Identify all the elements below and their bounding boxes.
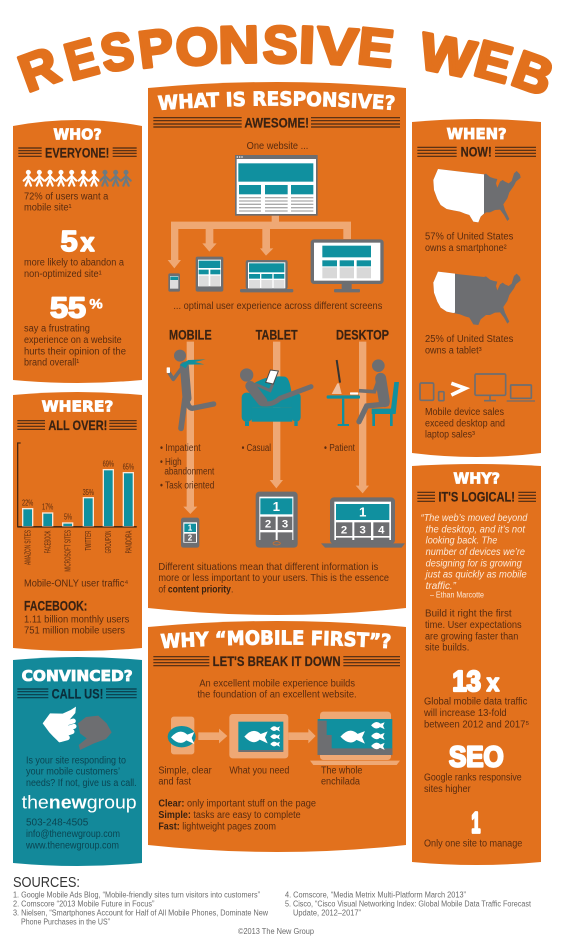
stat: 5x: [61, 226, 95, 258]
panel: convinced: [13, 657, 142, 866]
text: frustrating experience: hurts their opinion of the: [24, 346, 126, 357]
text: call to action: [26, 755, 137, 789]
bar chart: mobile-only traffic: PANDORA: [124, 531, 134, 553]
text: build it right: time. User expectations: [425, 620, 522, 631]
text: build it right: [425, 609, 522, 654]
text: device sales: [425, 407, 505, 441]
text: google ranks: sites higher: [424, 784, 471, 795]
text: abandon: non-optimized site¹: [24, 269, 102, 280]
text: intro: An excellent mobile experience builds: [199, 679, 355, 690]
text: intro: [197, 679, 357, 701]
sources right column: 5. Cisco, “Cisco Visual Networking Index: Global Mobile Data Traffic Forecast: [285, 900, 532, 909]
text: intro: the foundation of an excellent website.: [197, 690, 357, 701]
title: S: [262, 16, 298, 75]
arrow: tablet: [270, 342, 283, 488]
title: I: [298, 16, 316, 74]
text: facebook stats: [24, 599, 129, 637]
subheading: all over: [17, 418, 137, 433]
icon: person at desk: [327, 359, 399, 426]
panel: why: [412, 464, 541, 865]
text: tablet stat: owns a tablet³: [425, 345, 482, 356]
icon: running person: [167, 350, 214, 428]
text: smartphone stat: owns a smartphone²: [425, 243, 507, 254]
subheading: everyone: [18, 145, 137, 160]
icon: mobile greater than desktop: [420, 374, 535, 401]
icon: tablet layout: 3: [282, 519, 288, 531]
text: google ranks: [424, 773, 522, 795]
title: [12, 16, 561, 108]
text: build it right: Build it right the first: [425, 609, 512, 620]
text: contact details: www.thenewgroup.com: [25, 840, 119, 851]
sources heading: SOURCES:: [13, 874, 80, 891]
icon: tablet layout: 1: [273, 499, 281, 514]
icon: row of people: [24, 170, 131, 186]
arrow: phone to tablet: [198, 729, 227, 743]
text: device sales: laptop sales³: [425, 430, 476, 441]
panel: where: [13, 392, 142, 651]
icon: laptop layout: 3: [360, 524, 366, 536]
heading: when: WHEN?: [447, 126, 507, 143]
quote: ethan marcotte: “The web’s moved beyond: [421, 513, 528, 524]
text: mobile traits: • Impatient: [160, 443, 201, 454]
icon: tablet with fish: [229, 714, 288, 758]
quote: ethan marcotte: – Ethan Marcotte: [430, 589, 484, 599]
text: frustrating experience: say a frustrating: [24, 324, 90, 335]
subheading: break it down: LET'S BREAK IT DOWN: [213, 654, 341, 669]
text: content priority: [158, 562, 389, 595]
icon: laptop with fish: [310, 712, 400, 765]
bar chart: mobile-only traffic: 35%: [83, 488, 94, 497]
bar chart: mobile-only traffic: MICROSOFT SITES: [63, 530, 73, 572]
subheading: break it down: [153, 654, 400, 669]
text: data traffic: [423, 697, 529, 730]
label: desktop: DESKTOP: [336, 327, 389, 342]
quote: ethan marcotte: just as quickly as mobile: [424, 570, 527, 581]
text: tablet trait: • Casual: [242, 443, 271, 454]
stat: 13x: [452, 666, 500, 698]
heading: what is responsive: WHAT IS RESPONSIVE?: [157, 90, 395, 110]
icon: phone: [168, 273, 180, 292]
icon: phone layout: [181, 518, 199, 548]
text: abandon: more likely to abandon a: [24, 258, 124, 269]
title: R: [12, 36, 67, 104]
text: 72 percent: 72% of users want a: [24, 191, 109, 202]
panel: when: [412, 119, 541, 457]
quote: ethan marcotte: the desktop, and it’s not: [426, 524, 526, 535]
text: mobile traits: [160, 443, 215, 491]
text: tablet stat: 25% of United States: [425, 334, 513, 345]
text: call to action: Is your site responding to: [26, 755, 126, 766]
arrows: tree to devices: [168, 216, 351, 268]
text: frustrating experience: brand overall¹: [24, 358, 80, 369]
bar chart: mobile-only traffic: AMAZON SITES: [22, 530, 32, 565]
copyright: ©2013 The New Group: [238, 927, 314, 936]
subheading: awesome: [153, 116, 400, 131]
icon: person on sofa: [240, 368, 311, 426]
title: E: [469, 29, 518, 95]
logo: the new group: thenewgroup: [22, 791, 137, 812]
text: data traffic: Global mobile data traffic: [424, 697, 527, 708]
text: build it right: site builds.: [425, 643, 469, 654]
title: P: [135, 18, 177, 80]
icon: phone layout: 2: [188, 534, 193, 543]
text: the whole enchilada: enchilada: [321, 776, 360, 787]
title: V: [315, 17, 360, 77]
stat: 55 percent: [50, 293, 103, 325]
sources left column: [13, 891, 268, 927]
panel: what is responsive: [148, 82, 406, 615]
text: desktop trait: • Patient: [324, 443, 355, 454]
text: data traffic: will increase 13-fold: [423, 708, 507, 719]
text: the whole enchilada: The whole: [321, 765, 363, 776]
arrow: tablet to laptop: [288, 729, 316, 743]
title: N: [218, 16, 259, 74]
text: tablet stat: [425, 334, 513, 356]
text: device sales: Mobile device sales: [425, 407, 504, 418]
text: contact details: 503-248-4505: [26, 818, 89, 829]
quote: ethan marcotte: [421, 513, 528, 599]
stat: seo: SEO: [449, 742, 504, 774]
text: frustrating experience: experience on a website: [24, 335, 122, 346]
bar chart: mobile-only traffic: FACEBOOK: [42, 531, 52, 553]
text: what you need: What you need: [229, 765, 289, 776]
stat: 5x: 5: [61, 226, 78, 258]
icon: phone with fishbowl: [168, 717, 196, 754]
text: facebook stats: 751 million mobile users: [24, 626, 125, 637]
title: S: [96, 20, 138, 84]
icon: laptop: [240, 260, 293, 292]
stat: 13x: 13: [452, 666, 481, 698]
text: definitions: Clear: only important stuff on the page: [158, 799, 316, 810]
icon: laptop layout: 2: [341, 524, 347, 536]
sources left column: Phone Purchases in the US”: [21, 918, 110, 927]
bar chart: mobile-only traffic: 22%: [22, 499, 33, 508]
map: tablet share: [433, 272, 521, 325]
text: simple clear and fast: [158, 765, 212, 787]
text: smartphone stat: [425, 232, 513, 254]
quote: ethan marcotte: number of devices we’re: [426, 547, 525, 558]
text: one website: One website ...: [247, 141, 308, 152]
icon: laptop layout: 1: [359, 505, 367, 520]
title: E: [355, 17, 396, 79]
text: content priority: Different situations mean that different information is: [158, 562, 378, 573]
text: contact details: info@thenewgroup.com: [26, 829, 120, 840]
panel: who: [13, 120, 142, 383]
arrow: desktop: [356, 342, 369, 493]
quote: ethan marcotte: traffic.”: [426, 581, 457, 592]
text: definitions: Simple: tasks are easy to complete: [158, 810, 301, 821]
text: data traffic: between 2012 and 2017⁵: [424, 719, 529, 730]
text: content priority: more or less important to your users. This is the essence: [158, 573, 389, 584]
text: simple clear and fast: and fast: [158, 776, 191, 787]
text: definitions: Fast: lightweight pages zoom: [158, 821, 276, 832]
label: tablet: TABLET: [256, 327, 298, 342]
subheading: all over: ALL OVER!: [48, 418, 107, 433]
text: chart caption: Mobile-ONLY user traffic⁴: [24, 579, 128, 590]
title: B: [505, 40, 561, 108]
icon: tablet layout: 2: [265, 519, 271, 531]
bar chart: mobile-only traffic: 65%: [123, 463, 134, 472]
text: call to action: needs? If not, give us a call.: [26, 778, 137, 789]
subheading: now: NOW!: [461, 145, 492, 160]
sources right column: Update, 2012–2017”: [293, 909, 361, 918]
panel: why mobile first: [148, 621, 406, 852]
text: definitions: [158, 799, 316, 832]
text: 72 percent: [24, 191, 109, 214]
heading: why mobile first: WHY “MOBILE FIRST”?: [160, 630, 391, 648]
stat: 55 percent: 55: [50, 293, 86, 325]
map: smartphone share: [433, 169, 521, 222]
icon: browser window: [235, 155, 318, 216]
subheading: everyone: EVERYONE!: [45, 145, 109, 160]
icon: tablet: [196, 257, 223, 292]
text: mobile traits: • High: [160, 457, 182, 468]
icon: handshake hands: [43, 707, 112, 750]
subheading: logical: IT'S LOGICAL!: [438, 490, 515, 505]
heading: who: WHO?: [53, 126, 102, 143]
text: the whole enchilada: [321, 765, 363, 787]
stat: one: 1: [471, 808, 480, 840]
stat: 13x: x: [487, 670, 500, 697]
sources left column: 3. Nielsen, “Smartphones Account for Half of All Mobile Phones, Dominate New: [13, 909, 268, 918]
icon: laptop layout: [321, 497, 405, 548]
bar chart: mobile-only traffic: [18, 443, 137, 572]
text: facebook stats: FACEBOOK:: [24, 599, 87, 614]
bar chart: mobile-only traffic: 5%: [64, 513, 72, 522]
text: 72 percent: mobile site¹: [24, 203, 72, 214]
sources right column: [285, 891, 532, 918]
text: optimal experience: ... optimal user experience across different screens: [173, 301, 382, 312]
bar chart: mobile-only traffic: TWITTER: [83, 531, 93, 551]
arrow: mobile: [183, 342, 197, 514]
label: mobile: MOBILE: [169, 327, 212, 342]
text: one site: Only one site to manage: [424, 839, 523, 850]
text: simple clear and fast: Simple, clear: [158, 765, 212, 776]
heading: why: WHY?: [453, 470, 500, 487]
text: build it right: are growing faster than: [425, 631, 518, 642]
sources left column: 2. Comscore “2013 Mobile Future in Focus”: [13, 900, 155, 909]
icon: desktop monitor: [311, 239, 384, 292]
subheading: call us: CALL US!: [52, 686, 103, 701]
title: W: [415, 22, 481, 90]
subheading: call us: [17, 686, 137, 701]
bar chart: mobile-only traffic: 69%: [103, 459, 114, 468]
stat: 55 percent: %: [89, 295, 103, 311]
sources right column: 4. Comscore, “Media Metrix Multi-Platform March 2013”: [285, 891, 466, 900]
title: O: [174, 17, 220, 78]
text: device sales: exceed desktop and: [425, 418, 505, 429]
text: smartphone stat: 57% of United States: [425, 232, 513, 243]
text: content priority: of content priority.: [158, 584, 233, 595]
stat: 5x: x: [81, 230, 95, 257]
title: E: [59, 28, 104, 92]
heading: convinced: CONVINCED?: [22, 668, 133, 685]
text: mobile traits: abandonment: [164, 466, 215, 477]
text: google ranks: Google ranks responsive: [424, 773, 522, 784]
sources left column: 1. Google Mobile Ads Blog, “Mobile-friendly sites turn visitors into customers”: [13, 891, 260, 900]
text: mobile traits: • Task oriented: [160, 480, 214, 491]
bar chart: mobile-only traffic: 17%: [42, 503, 53, 512]
heading: where: WHERE?: [42, 399, 113, 416]
sources: [13, 874, 532, 936]
text: abandon: [24, 258, 124, 280]
icon: phone layout: 1: [188, 524, 193, 533]
quote: ethan marcotte: looking back. The: [426, 536, 498, 547]
quote: ethan marcotte: designing for is growing: [426, 558, 522, 569]
text: call to action: your mobile customers’: [26, 767, 120, 778]
text: facebook stats: 1.11 billion monthly users: [24, 614, 129, 625]
bar chart: mobile-only traffic: GROUPON: [103, 531, 113, 553]
subheading: now: [417, 145, 536, 160]
text: frustrating experience: [24, 324, 126, 369]
subheading: awesome: AWESOME!: [244, 116, 309, 131]
icon: tablet layout: [256, 492, 298, 548]
text: contact details: [25, 818, 120, 851]
icon: laptop layout: 4: [378, 524, 385, 536]
